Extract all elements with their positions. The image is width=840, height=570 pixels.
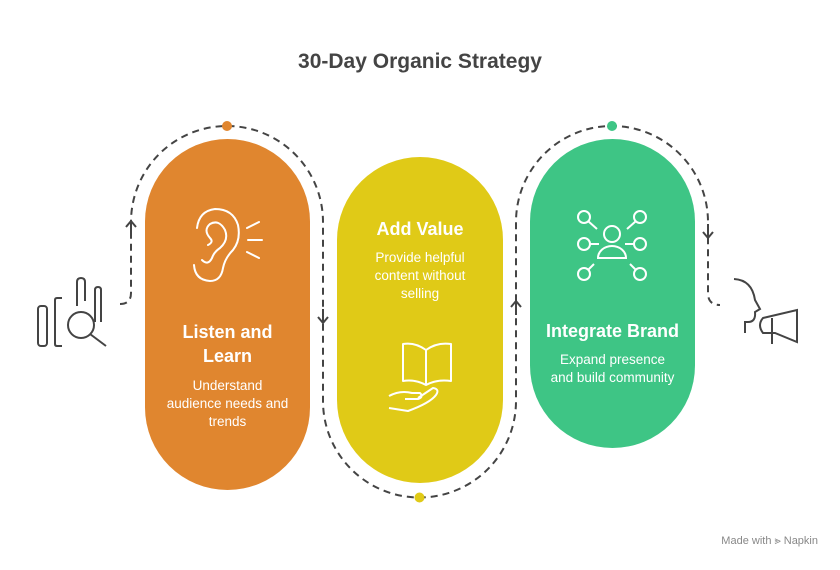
text: listen: trends <box>209 414 246 429</box>
panel: integrate <box>530 139 695 448</box>
icon: network <box>578 211 646 280</box>
icon: ear <box>194 209 262 281</box>
panel: listen <box>145 139 310 490</box>
icon: book in hand <box>389 344 451 411</box>
text: add value: content without <box>375 268 465 283</box>
icon: analytics search <box>38 278 106 346</box>
text: add value: Provide helpful <box>375 250 465 265</box>
icon: speaker megaphone <box>734 279 797 344</box>
text: integrate <box>546 321 679 385</box>
text: listen <box>167 322 288 429</box>
text: add value: selling <box>401 286 439 301</box>
text: integrate: and build community <box>551 370 674 385</box>
text: add value <box>375 219 466 301</box>
dashed connector path <box>120 126 720 498</box>
text: listen: Listen and <box>182 322 272 342</box>
dots <box>222 121 232 131</box>
text: listen: audience needs and <box>167 396 288 411</box>
text: integrate: Expand presence <box>560 352 665 367</box>
text: add value: Add Value <box>376 219 464 239</box>
text: listen: Understand <box>193 378 262 393</box>
text: integrate: Integrate Brand <box>546 321 679 341</box>
arrows <box>126 221 713 323</box>
panel: add value <box>337 157 503 483</box>
text: listen: Learn <box>203 346 252 366</box>
footer credit: Made with ⪢ Napkin <box>721 535 818 547</box>
title: 30-Day Organic Strategy <box>298 50 542 73</box>
